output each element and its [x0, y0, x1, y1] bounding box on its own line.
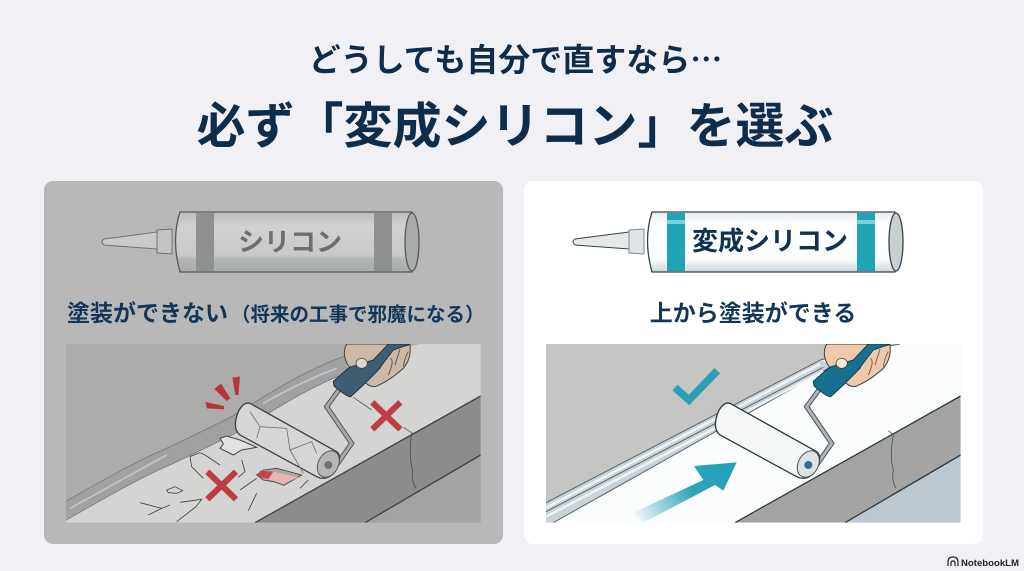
panel background	[524, 181, 983, 544]
top surface	[66, 344, 481, 523]
front face	[255, 396, 481, 523]
title	[196, 35, 834, 154]
sealant bead	[60, 364, 347, 514]
check mark	[675, 371, 717, 400]
main heading: 必ず「変成シリコン」を選ぶ	[196, 100, 834, 154]
panel: silicone (bad)	[44, 181, 503, 544]
paint roller	[715, 388, 832, 481]
watermark: NotebookLM: NotebookLM	[961, 558, 1019, 569]
hand and handle	[813, 344, 890, 397]
exposed pink patch	[257, 468, 302, 485]
paint roller	[235, 388, 352, 481]
cross marks	[207, 472, 236, 499]
front face	[735, 396, 961, 523]
impact marks	[205, 377, 240, 409]
panel: modified silicone (good)	[524, 181, 983, 544]
sealant strip	[546, 359, 830, 523]
tube label: シリコン	[238, 227, 342, 257]
illustration: failed painting	[60, 344, 481, 523]
caption: （将来の工事で邪魔になる）	[231, 304, 485, 326]
caption: 塗装ができない	[67, 300, 228, 326]
subtitle: どうしても自分で直すなら…	[309, 35, 722, 81]
top surface	[546, 344, 961, 523]
direction arrow	[632, 462, 737, 523]
panel background	[44, 181, 503, 544]
hand and handle	[333, 344, 410, 397]
icon: silicone caulk tube	[102, 212, 419, 272]
caption: 上から塗装ができる	[650, 300, 856, 326]
icon: modified silicone caulk tube	[573, 212, 903, 272]
peeled paint cracks	[220, 436, 257, 455]
illustration: successful painting	[546, 344, 961, 523]
tube label: 変成シリコン	[692, 226, 848, 256]
